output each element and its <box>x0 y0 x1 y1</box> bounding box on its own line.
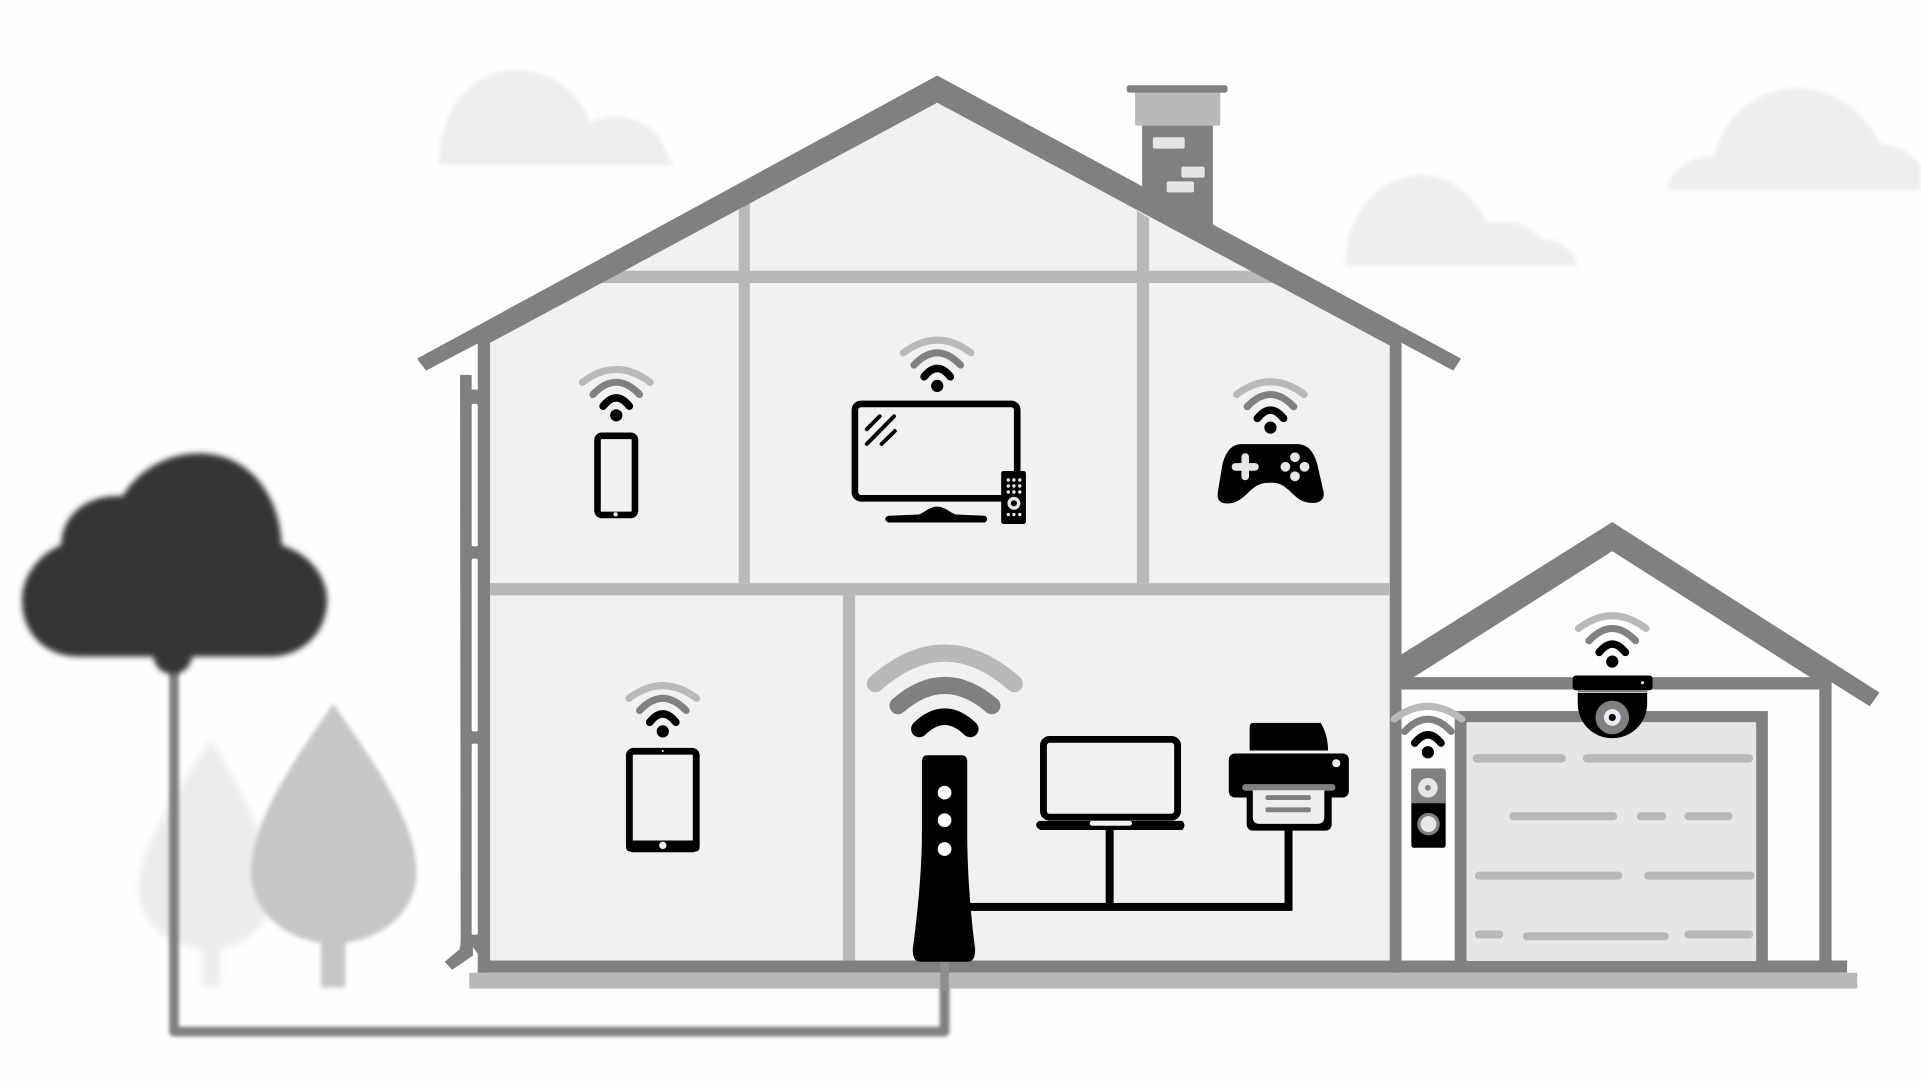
house roof <box>418 77 1460 369</box>
internet cloud <box>22 453 327 674</box>
smartphone with wifi <box>582 370 650 517</box>
house interior <box>490 100 1389 961</box>
interior dividers <box>490 200 1389 961</box>
background cloud left <box>439 70 674 165</box>
game controller with wifi <box>1218 382 1324 504</box>
garage roof <box>1402 523 1878 705</box>
wired connections <box>968 829 1293 911</box>
downspout <box>445 375 479 970</box>
internet cable from cloud to router <box>174 668 945 1032</box>
security camera with wifi <box>1573 616 1653 738</box>
laptop <box>1036 739 1184 830</box>
television with remote and wifi <box>855 340 1026 524</box>
tv remote <box>1001 471 1026 524</box>
chimney <box>1127 85 1228 228</box>
tablet with wifi <box>626 686 700 851</box>
background cloud centre <box>1345 175 1578 266</box>
foundation slab <box>469 973 1857 989</box>
tree: light background <box>138 740 272 987</box>
video doorbell with wifi <box>1394 706 1462 848</box>
router <box>913 755 975 962</box>
router wifi signal <box>875 653 1014 729</box>
garage side wall <box>1819 681 1832 963</box>
garage header beam <box>1402 677 1832 690</box>
garage <box>1402 523 1878 963</box>
printer <box>1229 723 1349 831</box>
tree: darker foreground <box>251 703 417 987</box>
router cable through floor <box>940 962 949 991</box>
background cloud right <box>1666 88 1921 190</box>
house walls and floor <box>478 342 1847 973</box>
garage door <box>1455 711 1768 962</box>
